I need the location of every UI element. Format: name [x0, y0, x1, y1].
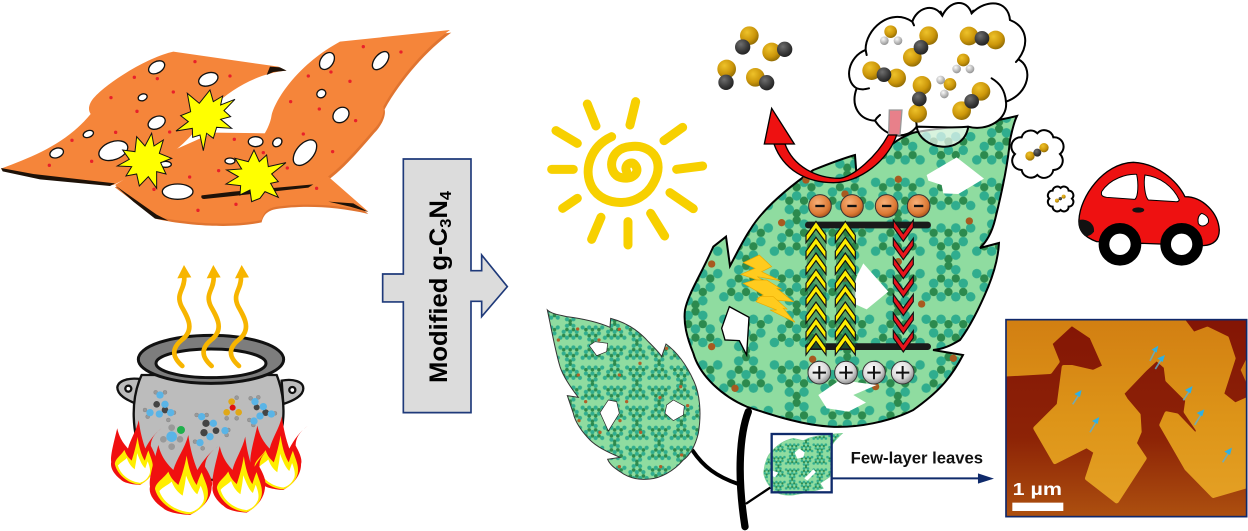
precursor molecules — [143, 390, 277, 450]
small left leaf — [547, 310, 700, 479]
block arrow shape — [383, 159, 507, 413]
AFM micrograph with scale bar — [1003, 317, 1248, 517]
arrow label: 4 — [438, 191, 455, 200]
arrow label: 3 — [438, 219, 455, 228]
red down chevrons — [893, 220, 913, 352]
flames — [111, 416, 308, 515]
red product arrow — [764, 108, 902, 183]
large central leaf — [685, 116, 1017, 427]
arrow label: Modified g-C — [425, 232, 453, 383]
leaf holes — [722, 157, 984, 412]
cloud bump over leaf — [917, 127, 968, 147]
few-layer leaf with magnification box — [764, 433, 994, 495]
pot body — [134, 375, 283, 480]
defect dots — [708, 176, 973, 392]
dark sheet edges — [1, 67, 368, 221]
tiny leaf holes — [772, 449, 816, 481]
yellow up chevrons — [806, 221, 855, 355]
image background — [1006, 320, 1247, 517]
cloud outline — [849, 3, 1027, 135]
stem and branches — [693, 412, 771, 527]
conduction and valence band bars — [808, 225, 928, 347]
CO2 and water molecules in cloud — [862, 25, 1005, 123]
cooking pot with precursors, steam and flames — [111, 265, 308, 515]
label: Few-layer leaves — [851, 448, 983, 467]
pot rim — [138, 335, 284, 383]
thought cloud, CO2, product arrow and car — [717, 3, 1219, 260]
leaf body — [685, 116, 1017, 427]
holes (positive charges) — [808, 361, 914, 384]
pot handles — [117, 379, 303, 404]
pointer arrow — [832, 473, 994, 484]
cloud scallop ticks — [857, 11, 1018, 127]
yellow bursts — [117, 90, 286, 202]
icon: sun — [552, 102, 703, 245]
flake sliver — [1241, 358, 1247, 383]
right sheet — [233, 30, 450, 193]
flakes — [1003, 317, 1248, 501]
grey arrow labelled Modified g-C3N4 — [383, 159, 507, 413]
arrow label: N — [425, 200, 453, 219]
scale bar label: 1 µm — [1013, 479, 1062, 499]
electrons — [809, 195, 930, 217]
exfoliated orange bulk sheets with holes and bursts — [1, 30, 451, 226]
steam arrows — [174, 265, 249, 366]
holes — [48, 49, 392, 199]
tiny leaf — [764, 433, 842, 495]
icon: lightning bolts — [741, 255, 795, 322]
image frame — [1006, 320, 1247, 517]
smallest thought bubble — [1048, 187, 1073, 211]
leaf holes — [589, 342, 684, 431]
blue arrows — [1073, 346, 1232, 462]
graphitic defects — [557, 327, 689, 468]
red dopant dots — [48, 45, 403, 212]
magnification box — [772, 434, 832, 492]
CO2 released molecules — [717, 26, 792, 90]
sheet thickness shadow — [115, 33, 451, 226]
small thought bubble — [1011, 130, 1064, 178]
icon: red car — [1079, 162, 1219, 260]
left sheet — [2, 52, 286, 185]
scale bar — [1012, 503, 1063, 511]
bottom sheet — [115, 133, 368, 224]
